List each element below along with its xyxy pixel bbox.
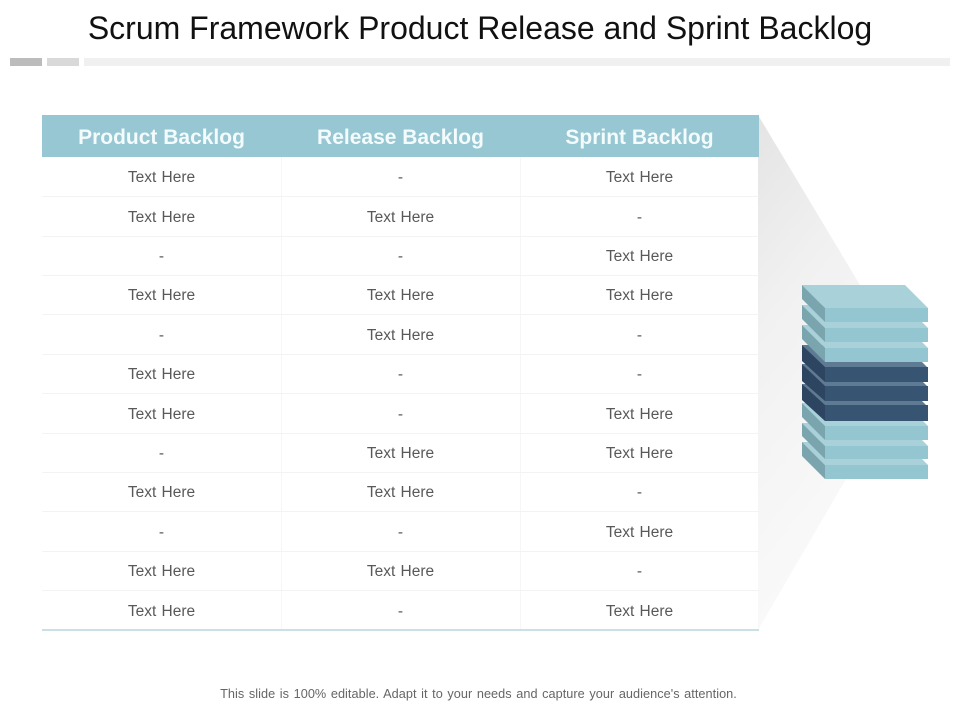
table rows: -: [637, 209, 642, 226]
header accent bar: [10, 58, 950, 66]
table rows: Text Here: [606, 524, 673, 541]
table rows: -: [637, 484, 642, 501]
table rows: Text Here: [606, 169, 673, 186]
table rows: Text Here: [606, 248, 673, 265]
icon: stacked backlog layers: [802, 285, 928, 479]
title: Scrum Framework Product Release and Sprint Backlog: [88, 10, 872, 46]
table rows: -: [159, 327, 164, 344]
table rows: Text Here: [128, 287, 195, 304]
table rows: Text Here: [128, 366, 195, 383]
table rows: -: [159, 445, 164, 462]
table rows: Text Here: [367, 327, 434, 344]
table rows: Text Here: [367, 209, 434, 226]
table rows: -: [398, 366, 403, 383]
table rows: Text Here: [128, 169, 195, 186]
table rows: -: [398, 524, 403, 541]
table rows: Text Here: [367, 445, 434, 462]
table rows: Text Here: [606, 287, 673, 304]
column heading: sprint backlog: Sprint Backlog: [565, 126, 714, 149]
table rows: -: [159, 248, 164, 265]
table rows: Text Here: [128, 406, 195, 423]
table rows: Text Here: [606, 603, 673, 620]
table rows: -: [637, 327, 642, 344]
table rows: Text Here: [128, 563, 195, 580]
table rows: -: [637, 366, 642, 383]
table rows: -: [159, 524, 164, 541]
table rows: Text Here: [128, 209, 195, 226]
funnel shadow: [758, 117, 860, 548]
table rows: -: [398, 603, 403, 620]
table rows: -: [637, 563, 642, 580]
table rows: Text Here: [128, 603, 195, 620]
column heading: product backlog: Product Backlog: [78, 126, 245, 149]
table rows: -: [398, 248, 403, 265]
table rows: Text Here: [367, 484, 434, 501]
table rows: [128, 169, 673, 620]
table rows: Text Here: [128, 484, 195, 501]
table rows: Text Here: [367, 287, 434, 304]
column heading: release backlog: Release Backlog: [317, 126, 484, 149]
table rows: Text Here: [606, 406, 673, 423]
table rows: Text Here: [606, 445, 673, 462]
table rows: Text Here: [367, 563, 434, 580]
table header band: [42, 115, 759, 157]
footer note: This slide is 100% editable. Adapt it to your needs and capture your audience's attention.: [220, 687, 737, 701]
table rows: -: [398, 406, 403, 423]
table rows: -: [398, 169, 403, 186]
